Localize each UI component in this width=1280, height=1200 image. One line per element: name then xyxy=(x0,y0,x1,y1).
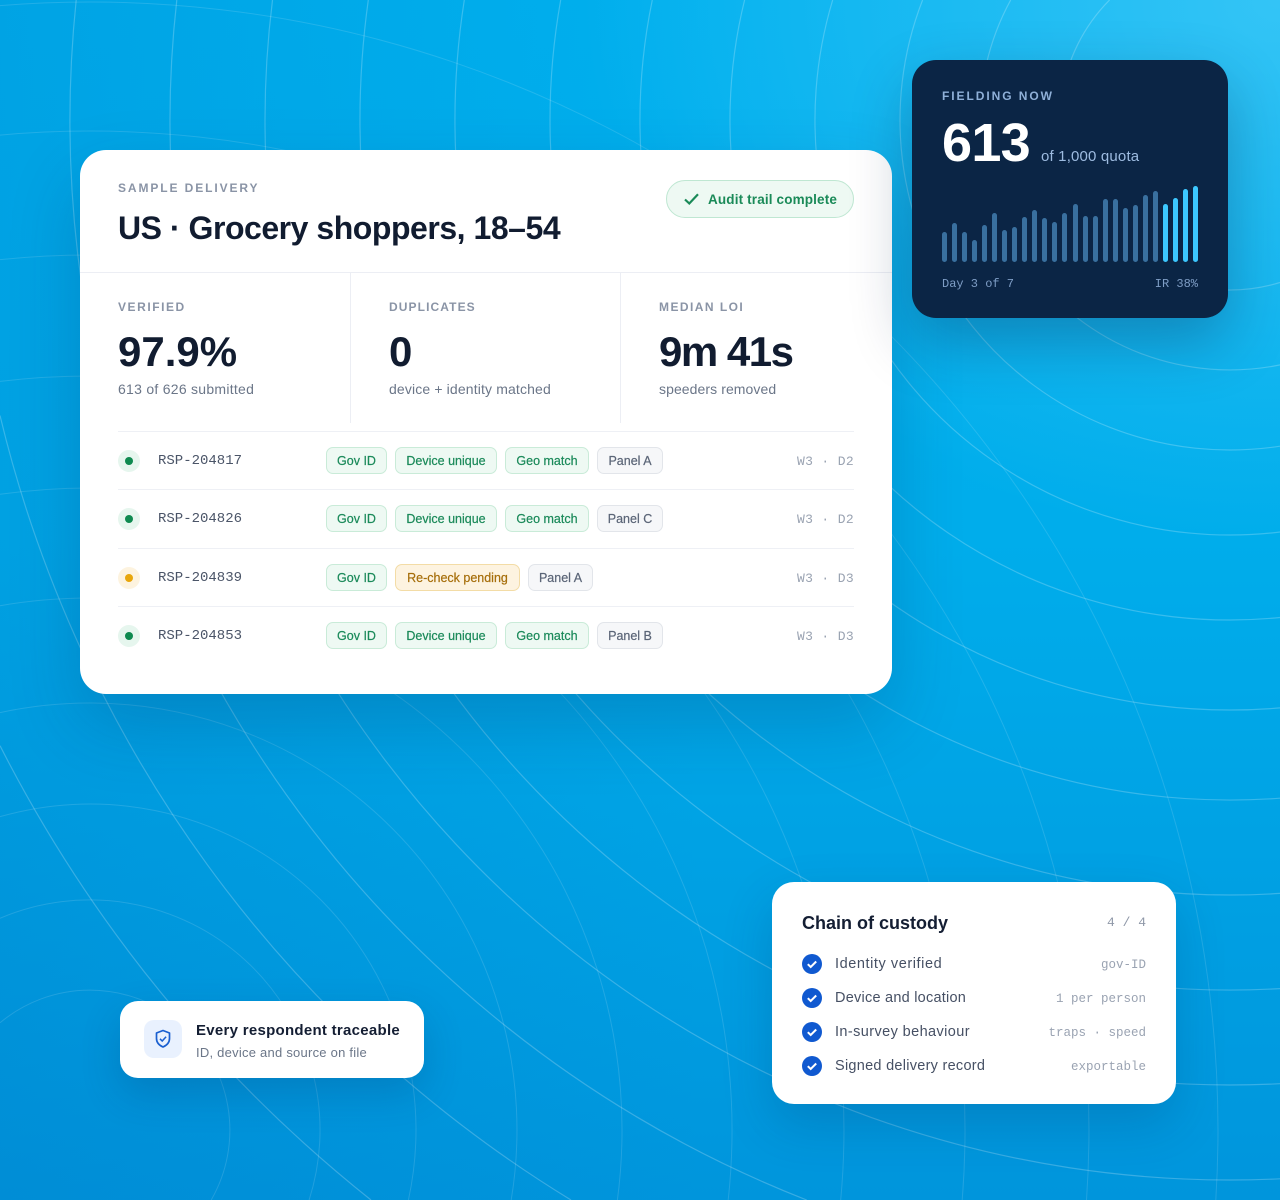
callout title: Every respondent traceable xyxy=(196,1022,400,1039)
stat: median LOI: speeders removed xyxy=(659,381,776,397)
respondent row 204817: W3 · D2 xyxy=(797,454,854,469)
panel: chain of custody xyxy=(772,882,1176,1104)
respondent row 204826: Device unique xyxy=(406,512,486,526)
header divider xyxy=(80,272,892,273)
bar chart xyxy=(942,186,1198,262)
step: identity: gov-ID xyxy=(1101,958,1146,972)
respondent row 204839: RSP-204839 xyxy=(158,570,242,586)
respondent row 204817 xyxy=(118,431,854,489)
respondent row 204853: W3 · D3 xyxy=(797,629,854,644)
step: device xyxy=(802,988,1146,1008)
step: identity: Identity verified xyxy=(835,956,942,972)
respondent row 204853: Device unique xyxy=(406,629,486,643)
step: delivery record: exportable xyxy=(1071,1060,1146,1074)
audit badge xyxy=(666,180,854,218)
respondent row 204817: RSP-204817 xyxy=(158,453,242,469)
step: behaviour: In-survey behaviour xyxy=(835,1024,970,1040)
respondent row 204826: W3 · D2 xyxy=(797,512,854,527)
respondent row 204817: Gov ID xyxy=(337,454,376,468)
callout subtitle: ID, device and source on file xyxy=(196,1045,367,1060)
respondent row 204826: RSP-204826 xyxy=(158,511,242,527)
label: FIELDING NOW xyxy=(942,89,1054,103)
respondent row 204826: Panel C xyxy=(608,512,652,526)
respondent row 204826: Gov ID xyxy=(337,512,376,526)
stat: median LOI: MEDIAN LOI xyxy=(659,300,744,314)
eyebrow label: SAMPLE DELIVERY xyxy=(118,181,259,195)
quota caption: of 1,000 quota xyxy=(1041,148,1139,165)
stat: median LOI xyxy=(659,300,792,397)
step: identity xyxy=(802,954,1146,974)
heading: US · Grocery shoppers, 18–54 xyxy=(118,210,560,246)
stat: verified: 613 of 626 submitted xyxy=(118,381,254,397)
respondent row 204826 xyxy=(118,489,854,547)
icon: check xyxy=(684,194,699,205)
step: behaviour: traps · speed xyxy=(1048,1026,1146,1040)
respondent row 204853: RSP-204853 xyxy=(158,628,242,644)
stat: duplicates: 0 xyxy=(389,328,412,375)
respondent row 204839: W3 · D3 xyxy=(797,571,854,586)
respondent row 204826: Geo match xyxy=(516,512,578,526)
respondent row 204839 xyxy=(118,548,854,606)
respondent row 204817: Device unique xyxy=(406,454,486,468)
stat: median LOI: 9m 41s xyxy=(659,328,792,375)
step: device: Device and location xyxy=(835,990,966,1006)
quota number: 613 xyxy=(942,113,1030,173)
respondent row 204839: Re-check pending xyxy=(407,571,508,585)
step: device: 1 per person xyxy=(1056,992,1146,1006)
stat: duplicates xyxy=(351,273,621,423)
stat: verified xyxy=(80,273,351,423)
step: behaviour xyxy=(802,1022,1146,1042)
stat: duplicates: device + identity matched xyxy=(389,381,551,397)
icon: shield xyxy=(144,1020,182,1058)
respondent row 204817: Geo match xyxy=(516,454,578,468)
day label: Day 3 of 7 xyxy=(942,277,1014,291)
step: delivery record xyxy=(802,1056,1146,1076)
respondent row 204839: Gov ID xyxy=(337,571,376,585)
respondent row 204853: Panel B xyxy=(608,629,652,643)
panel: traceability callout xyxy=(120,1001,424,1078)
respondent row 204817: Panel A xyxy=(608,454,652,468)
respondent row 204853: Geo match xyxy=(516,629,578,643)
panel: sample delivery card xyxy=(80,150,892,694)
step count: 4 / 4 xyxy=(1107,915,1146,930)
stat: duplicates: DUPLICATES xyxy=(389,300,476,314)
stat: verified: 97.9% xyxy=(118,328,237,375)
badge text: Audit trail complete xyxy=(708,192,837,207)
respondent row 204839: Panel A xyxy=(539,571,582,585)
respondent row 204853 xyxy=(118,606,854,664)
step: delivery record: Signed delivery record xyxy=(835,1058,985,1074)
incidence label: IR 38% xyxy=(1155,277,1198,291)
stat: verified: VERIFIED xyxy=(118,300,186,314)
respondent row 204853: Gov ID xyxy=(337,629,376,643)
card title: Chain of custody xyxy=(802,913,948,933)
panel: fielding now xyxy=(912,60,1228,318)
